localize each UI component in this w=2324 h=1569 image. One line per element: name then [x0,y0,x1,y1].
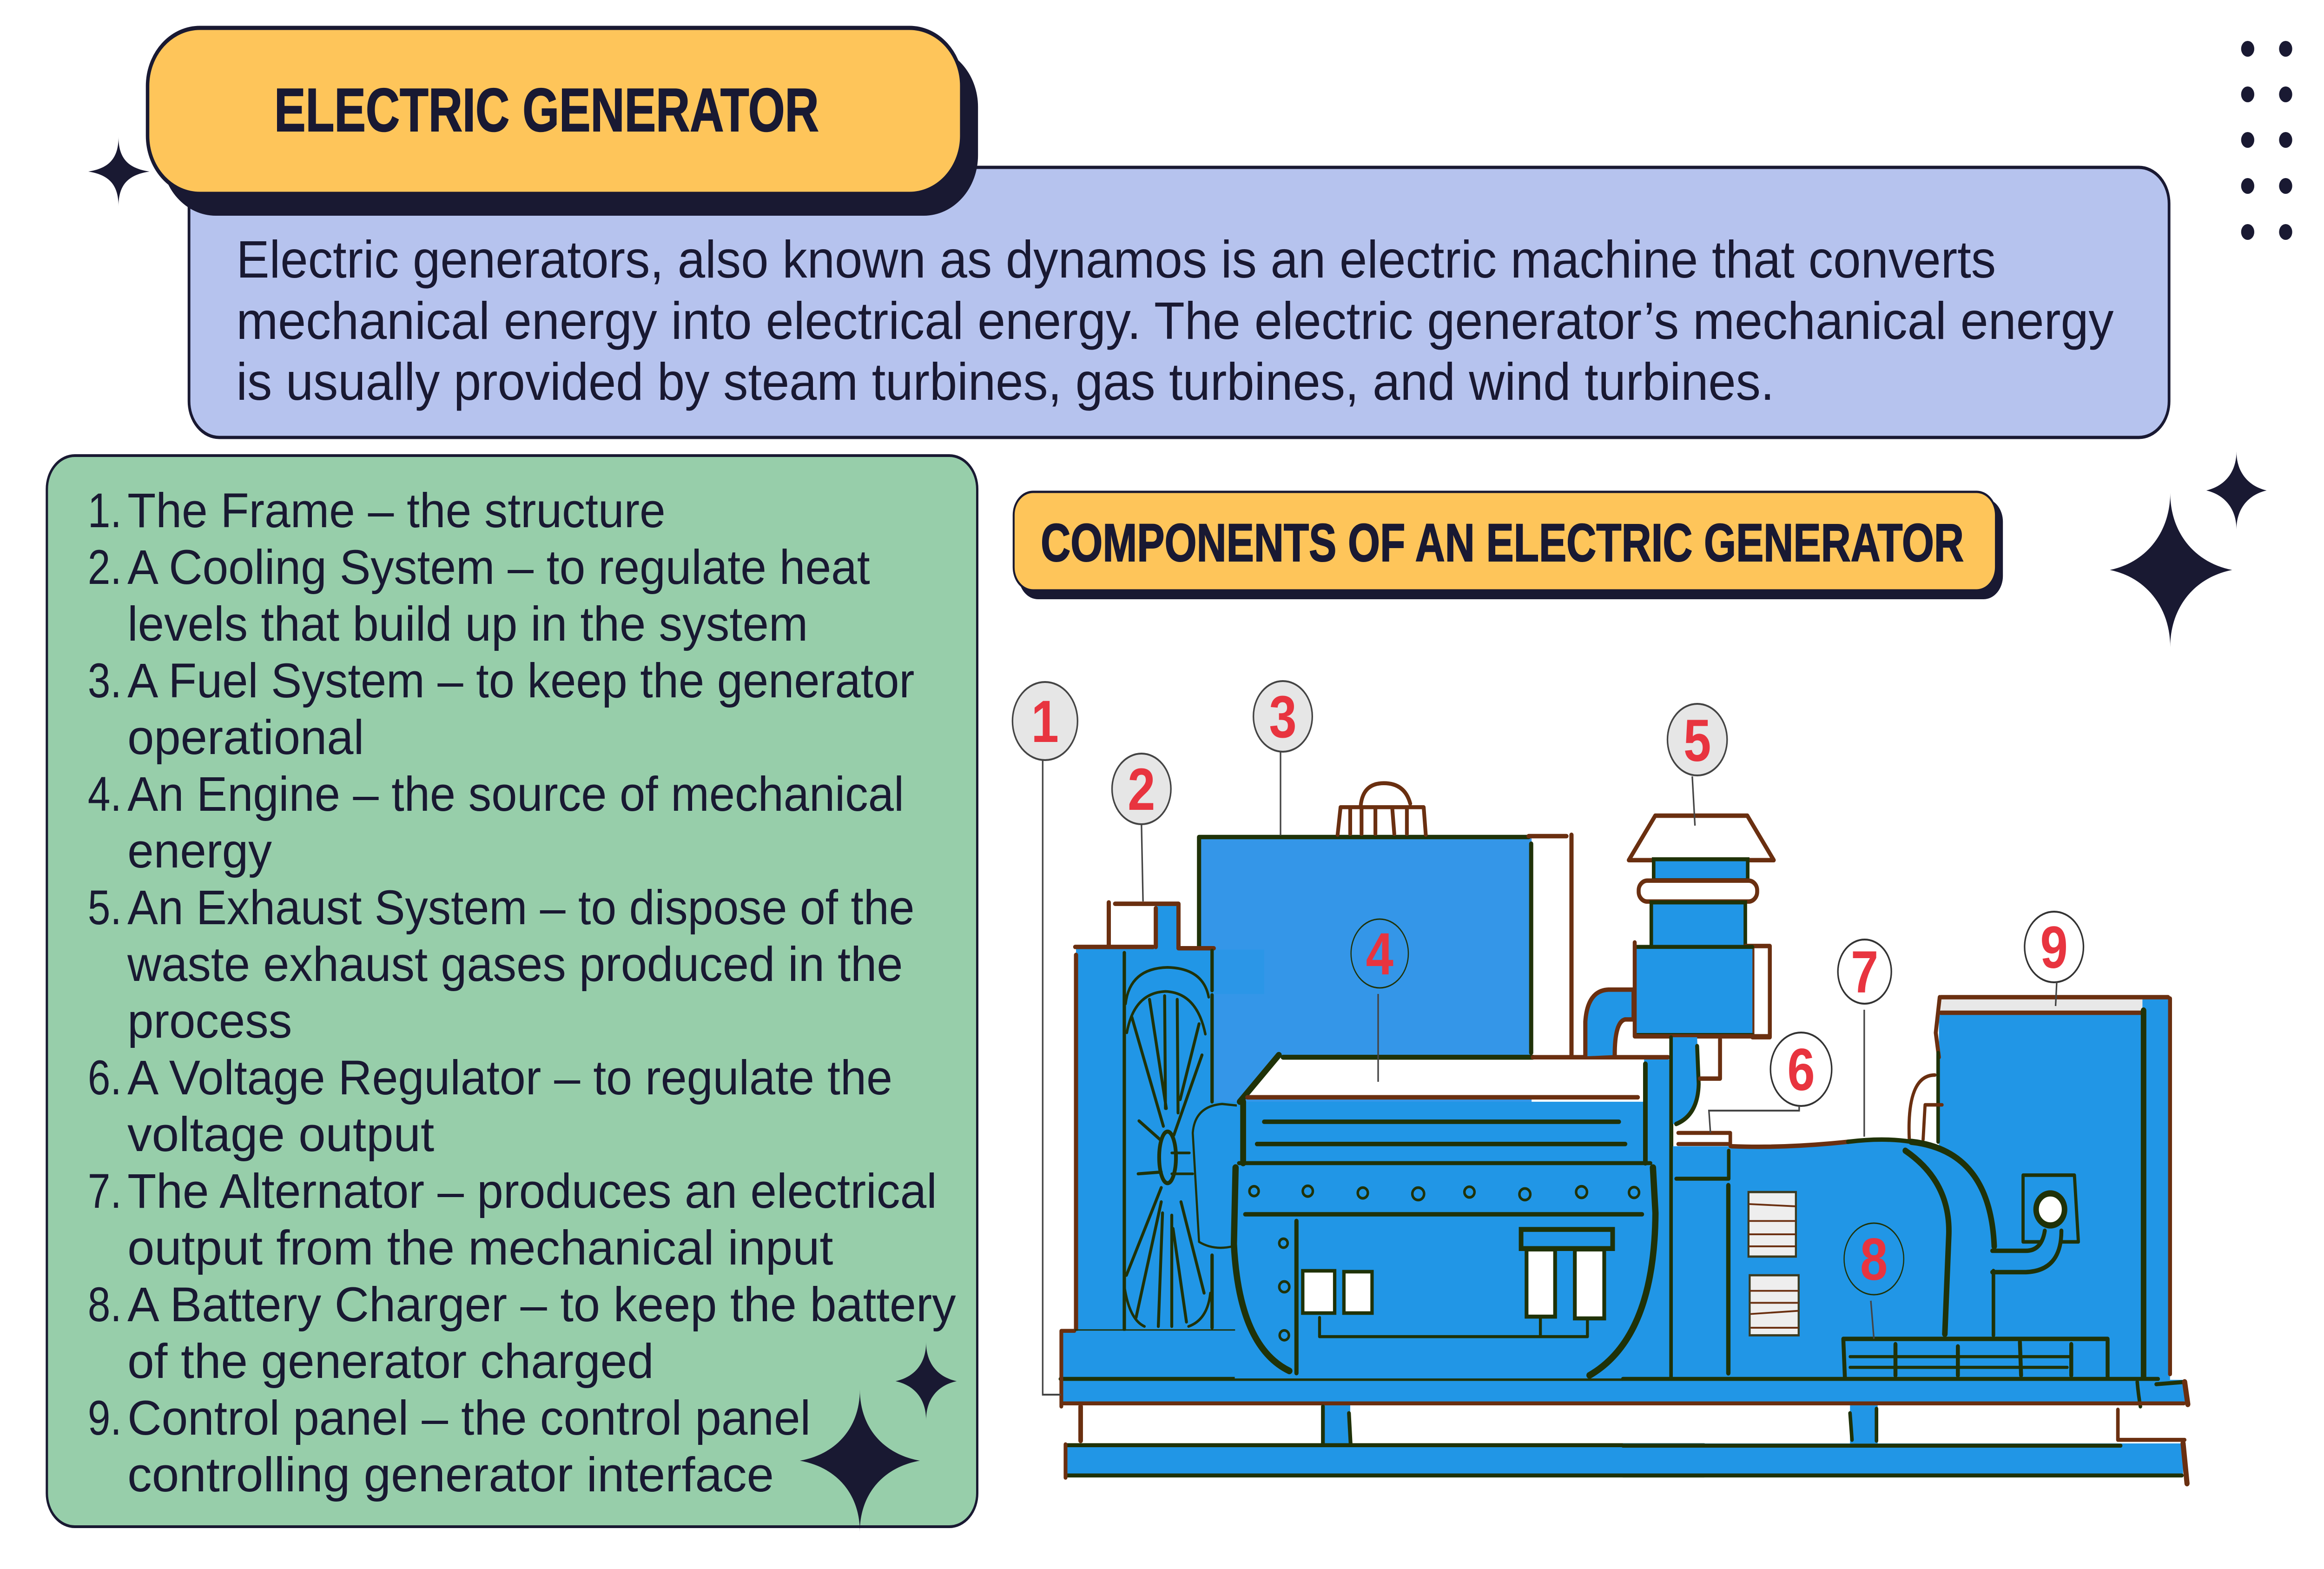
text block: generator definition [236,231,2113,411]
control box [1909,997,2170,1380]
list: numbered components: 6. [88,1051,122,1105]
callout 4: engine [1351,919,1408,1082]
alternator [1671,1037,2061,1380]
engine [1234,1044,1671,1378]
list: numbered components: waste exhaust gases produced in the [127,938,903,992]
icon: small sparkle on list panel [896,1342,957,1420]
list: numbered components: 1. [88,484,122,538]
panel: component list [47,456,977,1527]
list: numbered components: The Frame – the structure [127,484,666,538]
list: numbered components: 9. [88,1391,122,1445]
list: numbered components: output from the mechanical input [127,1221,833,1275]
callout 2: cooling system: 2 [1128,756,1155,822]
callout 8: battery charger: 8 [1860,1226,1888,1292]
icon: large sparkle on list panel [800,1390,920,1532]
illustration: generator [1012,681,2188,1483]
list: numbered components: An Engine – the source of mechanical [127,768,904,821]
callout 9: control panel [2025,912,2083,1006]
icon: large sparkle top right [2110,493,2232,647]
list: numbered components: energy [127,824,272,878]
callout 8: battery charger [1844,1223,1904,1339]
list: numbered components: 5. [88,881,122,935]
list: numbered components: 4. [88,768,122,821]
list: numbered components: A Voltage Regulator – to regulate the [127,1051,892,1105]
intake pipe [1585,990,1634,1056]
callout 7: alternator [1838,939,1891,1137]
list: numbered components: voltage output [127,1108,434,1162]
list: numbered components: of the generator charged [127,1335,654,1389]
callout 1: frame: 1 [1031,688,1059,755]
exhaust stack [1629,816,1774,1124]
list: numbered components: 7. [88,1165,122,1218]
list: numbered components: 2. [88,541,122,595]
callout 3: fuel system [1254,681,1312,835]
list: numbered components: 8. [88,1278,122,1332]
list: numbered components: Control panel – the control panel [127,1391,811,1445]
heading: components: COMPONENTS OF AN ELECTRIC GENERATOR [1041,513,1964,573]
callout 5: exhaust system [1668,704,1727,826]
list: numbered components: operational [127,711,364,765]
title banner: ELECTRIC GENERATOR [274,75,819,144]
generator: left section, tank radiator engine [1061,783,1704,1478]
generator: right section, exhaust alternator control box [1623,816,2188,1483]
icon: sparkle left of title [88,137,150,206]
list: numbered components: A Battery Charger – to keep the battery [127,1278,956,1332]
list: numbered components: A Cooling System – to regulate heat [127,541,870,595]
text block: generator definition: mechanical energy into electrical energy. The electric generator’s mechanical energy [236,292,2114,351]
heading: components [1014,492,2003,599]
list: numbered components: The Alternator – produces an electrical [127,1165,937,1218]
text block: generator definition: Electric generators, also known as dynamos is an electric machine that converts [236,231,1996,289]
base frame [1061,1330,1704,1478]
panel: description [189,167,2169,437]
list: numbered components: A Fuel System – to keep the generator [127,654,915,708]
list: numbered components: 3. [88,654,122,708]
text block: generator definition: is usually provided by steam turbines, gas turbines, and wind turbines. [236,353,1774,411]
callout 6: voltage regulator: 6 [1787,1036,1815,1103]
list: numbered components: levels that build up in the system [127,597,808,651]
list: numbered components [88,484,956,1502]
callout 4: engine: 4 [1366,920,1393,987]
base frame right end [1623,1379,2188,1483]
list: numbered components: process [127,994,292,1048]
list: numbered components: An Exhaust System – to dispose of the [127,881,915,935]
fuel tank [1199,783,1571,1104]
callout 7: alternator: 7 [1851,939,1878,1005]
callout 9: control panel: 9 [2040,914,2068,980]
callout 3: fuel system: 3 [1269,683,1297,750]
icon: small sparkle top right [2206,451,2267,530]
callout 6: voltage regulator [1709,1033,1832,1133]
title banner [148,28,978,216]
battery charger grid [1843,1339,2107,1377]
radiator and fan [1075,902,1245,1333]
callout 5: exhaust system: 5 [1684,707,1711,774]
list: numbered components: controlling generator interface [127,1448,774,1502]
callout 1: frame [1012,682,1077,1395]
decorative dot grid [2241,41,2292,240]
callout 2: cooling system [1112,754,1171,901]
